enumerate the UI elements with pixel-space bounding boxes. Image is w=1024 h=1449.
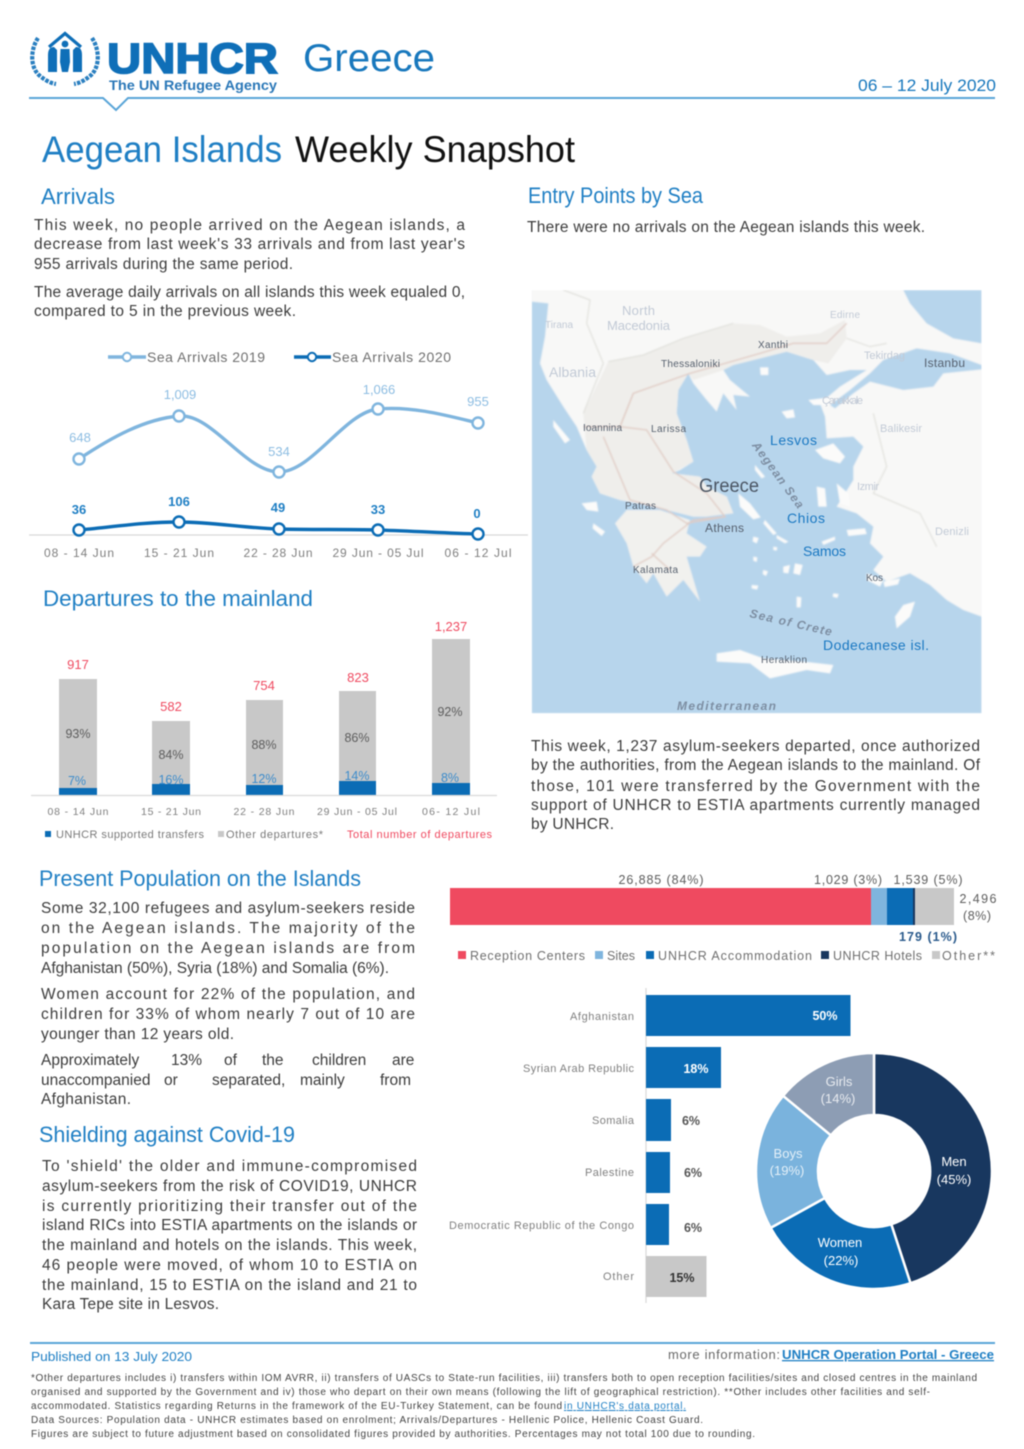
stacked bar legend: Sites (607, 949, 635, 963)
chart axis labels: 08 - 14 Jun (44, 546, 114, 560)
population paragraph: separated, (212, 1072, 285, 1089)
line: sea arrivals 2019: 1,009 (164, 387, 196, 402)
line: sea arrivals 2020: 0 (473, 506, 481, 521)
footnotes: Data Sources: Population data - UNHCR estimates based on enrolment; Arrivals/Departures - Hellenic Police, Hellenic Coast Guard. (31, 1415, 703, 1426)
title (42, 129, 576, 170)
map labels: Kalamata (633, 565, 678, 576)
stacked bar values (618, 873, 997, 944)
origin labels: Syrian Arab Republic (523, 1063, 634, 1075)
logo tagline: The UN Refugee Agency (109, 77, 277, 93)
map labels: Dodecanese isl. (823, 637, 929, 653)
country name: Greece (303, 37, 435, 80)
population paragraph: the (262, 1052, 284, 1069)
map labels: Albania (549, 364, 596, 380)
map labels: Istanbu (924, 356, 965, 370)
donut labels: Men (941, 1154, 967, 1169)
population paragraph (41, 900, 415, 1108)
origin labels (449, 1011, 635, 1283)
line: sea arrivals 2020: 106 (168, 494, 190, 509)
supported percentages: 14% (344, 769, 370, 783)
bar legend (45, 829, 492, 841)
population paragraph: Approximately (41, 1052, 139, 1069)
population paragraph: children for 33% of whom nearly 7 out of 10 are (41, 1006, 415, 1023)
map labels: Athens (705, 521, 744, 535)
total labels (67, 619, 467, 714)
donut labels: (22%) (824, 1253, 858, 1268)
map labels: Edirne (830, 310, 860, 321)
map labels: Heraklion (761, 655, 807, 666)
panel: present population (39, 866, 415, 1108)
population paragraph: mainly (300, 1072, 345, 1089)
other percentages: 93% (65, 727, 91, 741)
origin values: 6% (682, 1114, 700, 1128)
footnotes: *Other departures includes i) transfers within IOM AVRR, ii) transfers of UASCs to State-run facilities, iii) transfers both to open reception facilities/sites and closed centres in the mainland (31, 1373, 977, 1384)
chart axis labels: 29 Jun - 05 Jul (332, 546, 424, 560)
map labels: Greece (699, 476, 759, 497)
heading: arrivals: Arrivals (41, 184, 115, 209)
other percentages: 84% (158, 748, 184, 762)
footnotes: Figures are subject to future adjustment based on consolidated figures provided by authorities. Percentages may not total 100 due to rounding. (31, 1429, 755, 1440)
map of Greece and the Aegean (532, 290, 982, 713)
departures narrative text: This week, 1,237 asylum-seekers departed, once authorized (531, 738, 980, 755)
more information link (668, 1347, 994, 1362)
total labels: 1,237 (435, 619, 467, 634)
population paragraph: children (312, 1052, 366, 1069)
donut labels: Boys (774, 1146, 803, 1161)
panel: shielding against Covid-19 (39, 1122, 417, 1313)
other percentages: 88% (251, 738, 277, 752)
map labels: Balikesir (880, 423, 922, 435)
stacked bar values: 1,539 (5%) (894, 873, 962, 887)
map labels: Denizli (935, 526, 969, 538)
map labels: Xanthi (758, 340, 788, 351)
departures narrative text: by the authorities, from the Aegean islands to the mainland. Of (531, 757, 981, 774)
population paragraph: younger than 12 years old. (41, 1026, 234, 1043)
footnotes: in UNHCR's data portal. (564, 1401, 686, 1412)
line: sea arrivals 2019: 534 (268, 444, 290, 459)
bar axis labels: 06- 12 Jul (422, 806, 480, 818)
line: sea arrivals 2019 (69, 382, 489, 478)
origin values: 15% (669, 1271, 695, 1285)
total labels: 823 (347, 670, 369, 685)
population paragraph: Some 32,100 refugees and asylum-seekers reside (41, 900, 415, 917)
arrivals paragraph: This week, no people arrived on the Aegean islands, a (34, 217, 465, 234)
stacked bar values: 2,496 (960, 892, 997, 906)
shielding paragraph: Kara Tepe site in Lesvos. (42, 1296, 219, 1313)
total labels: 582 (160, 699, 182, 714)
stacked bar values: 1,029 (3%) (814, 873, 882, 887)
bar axis labels: 29 Jun - 05 Jul (317, 806, 397, 818)
origin labels: Other (603, 1271, 634, 1283)
bar legend: Other departures* (226, 829, 324, 841)
date range: 06 – 12 July 2020 (858, 76, 996, 95)
donut labels: (45%) (937, 1172, 971, 1187)
bar axis labels (48, 806, 480, 818)
header (29, 34, 996, 110)
map labels: Chios (787, 510, 825, 526)
stacked bar legend (458, 949, 995, 963)
map labels: Mediterranean (677, 699, 776, 713)
map labels: Sea of Crete (748, 606, 834, 639)
map labels: Tirana (545, 320, 573, 331)
origin values: 6% (684, 1221, 702, 1235)
shielding paragraph: 46 people were moved, of whom 10 to ESTIA on (42, 1257, 417, 1274)
chart legend: Sea Arrivals 2020 (332, 349, 451, 365)
stacked bar (450, 888, 954, 925)
more information link: more information: (668, 1347, 780, 1362)
line: sea arrivals 2020: 49 (271, 500, 285, 515)
heading: departures: Departures to the mainland (43, 586, 313, 611)
footnotes: accommodated. Statistics regarding Returns in the framework of the EU-Turkey Statement, can be found (31, 1401, 562, 1412)
map labels: North (622, 303, 655, 318)
logo wordmark: UNHCR (107, 35, 278, 83)
publication date: Published on 13 July 2020 (31, 1349, 192, 1364)
stacked bar values: (8%) (963, 909, 991, 923)
icon: UNHCR emblem (32, 34, 98, 84)
chart axis labels (44, 546, 512, 560)
map labels: Ioannina (583, 423, 622, 434)
bars: other departures (59, 639, 470, 788)
chart legend: Sea Arrivals 2019 (147, 349, 265, 365)
chart axis labels: 06 - 12 Jul (444, 546, 512, 560)
donut labels: Girls (826, 1074, 853, 1089)
map labels: Aegean Sea (749, 438, 807, 511)
heading: entry points: Entry Points by Sea (528, 183, 704, 208)
donut chart: age and gender (756, 1053, 992, 1289)
line: sea arrivals 2019: 648 (69, 430, 91, 445)
departures narrative text: those, 101 were transferred by the Government with the (531, 778, 980, 795)
line: sea arrivals 2019: 955 (467, 394, 489, 409)
population paragraph: Women account for 22% of the population, and (41, 986, 415, 1003)
map labels: Çanakkale (822, 395, 863, 407)
header rule with notch (29, 98, 995, 110)
other percentages: 92% (437, 705, 463, 719)
supported percentages: 12% (251, 772, 277, 786)
donut labels (770, 1074, 971, 1268)
donut labels: (19%) (770, 1163, 804, 1178)
panel: sea arrivals line chart (29, 349, 528, 560)
panel: arrivals text (34, 184, 465, 320)
departures narrative text: support of UNHCR to ESTIA apartments currently managed (531, 797, 980, 814)
title: Aegean Islands (42, 129, 282, 170)
population paragraph: from (380, 1072, 411, 1089)
footnotes: organised and supported by the Government and iv) those who depart on their own means (following the lift of geographical restriction). **Other includes other facilities and self- (31, 1387, 930, 1398)
arrivals paragraph: The average daily arrivals on all islands this week equaled 0, (34, 284, 465, 301)
chart axis labels: 15 - 21 Jun (144, 546, 214, 560)
population paragraph: unaccompanied (41, 1072, 150, 1089)
shielding paragraph: asylum-seekers from the risk of COVID19, UNHCR (42, 1178, 417, 1195)
chart axis labels: 22 - 28 Jun (244, 546, 312, 560)
population paragraph: or (164, 1072, 178, 1089)
origin values: 18% (683, 1062, 709, 1076)
stacked bar values: 26,885 (84%) (618, 873, 704, 887)
total labels: 754 (253, 678, 275, 693)
origin labels: Democratic Republic of the Congo (449, 1220, 634, 1232)
other percentages (65, 705, 463, 762)
heading: present population: Present Population on the Islands (39, 866, 361, 891)
arrivals paragraph: compared to 5 in the previous week. (34, 303, 296, 320)
line: sea arrivals 2020: 33 (371, 502, 385, 517)
shielding paragraph: To 'shield' the older and immune-compromised (42, 1158, 417, 1175)
entry points text: There were no arrivals on the Aegean islands this week. (527, 219, 925, 236)
map labels: Lesvos (770, 432, 817, 448)
map labels: Patras (625, 501, 656, 512)
chart legend (108, 349, 451, 365)
map labels: Tekirdag (864, 350, 905, 362)
arrivals paragraph: decrease from last week's 33 arrivals and from last year's (34, 236, 465, 253)
shielding paragraph: the mainland, 15 to ESTIA on the island and 21 to (42, 1277, 417, 1294)
bar axis labels: 22 - 28 Jun (234, 806, 295, 818)
bar axis labels: 15 - 21 Jun (141, 806, 201, 818)
more information link: UNHCR Operation Portal - Greece (782, 1347, 994, 1362)
arrivals paragraph: 955 arrivals during the same period. (34, 256, 293, 273)
population paragraph: 13% (171, 1052, 202, 1069)
panel: entry points by sea (527, 183, 925, 236)
bar legend: UNHCR supported transfers (56, 829, 204, 841)
bar axis labels: 08 - 14 Jun (48, 806, 109, 818)
shielding paragraph: the mainland and hotels on the islands. This week, (42, 1237, 417, 1254)
bars: UNHCR supported transfers (59, 781, 470, 795)
other percentages: 86% (344, 731, 370, 745)
population paragraph: of (224, 1052, 238, 1069)
panel: accommodation stacked bar (450, 873, 997, 963)
donut labels: (14%) (821, 1091, 855, 1106)
panel: departures bar chart (31, 619, 497, 841)
population paragraph: Afghanistan. (41, 1091, 131, 1108)
shielding paragraph (42, 1158, 417, 1313)
origin labels: Afghanistan (570, 1011, 634, 1023)
origin labels: Palestine (585, 1167, 634, 1179)
map labels: Thessaloniki (661, 359, 720, 370)
origin values: 6% (684, 1166, 702, 1180)
map labels: Kos (866, 573, 883, 584)
origin bars (646, 995, 850, 1245)
supported percentages: 16% (158, 773, 184, 787)
supported percentages: 7% (68, 774, 86, 788)
donut labels: Women (818, 1235, 862, 1250)
stacked bar values: 179 (1%) (899, 930, 957, 944)
map labels: Larissa (651, 424, 686, 435)
origin values (669, 1009, 838, 1285)
map labels: Izmir (857, 481, 879, 493)
departures narrative text (531, 738, 981, 833)
shielding paragraph: island RICs into ESTIA apartments on the islands or (42, 1217, 417, 1234)
heading: shielding: Shielding against Covid-19 (39, 1122, 295, 1147)
shielding paragraph: is currently prioritizing their transfer out of the (42, 1198, 417, 1215)
line: sea arrivals 2019: 1,066 (363, 382, 395, 397)
supported percentages: 8% (441, 771, 459, 785)
population paragraph: on the Aegean islands. The majority of the (41, 920, 415, 937)
map labels: Macedonia (607, 318, 671, 333)
total labels: 917 (67, 657, 89, 672)
bar legend: Total number of departures (347, 829, 492, 841)
stacked bar legend: UNHCR Accommodation (658, 949, 812, 963)
origin labels: Somalia (592, 1115, 635, 1127)
population paragraph: population on the Aegean islands are from (41, 940, 415, 957)
stacked bar legend: UNHCR Hotels (833, 949, 922, 963)
footnotes (31, 1373, 977, 1440)
departures narrative text: by UNHCR. (531, 816, 614, 833)
stacked bar legend: Other** (942, 949, 995, 963)
supported percentages (68, 769, 459, 788)
line: sea arrivals 2020: 36 (72, 502, 86, 517)
population paragraph: Afghanistan (50%), Syria (18%) and Somalia (6%). (41, 960, 389, 977)
line: sea arrivals 2020 (72, 494, 484, 540)
panel: country of origin bar chart (449, 988, 850, 1303)
title: Weekly Snapshot (295, 129, 576, 170)
origin values: 50% (812, 1009, 838, 1023)
footer (30, 1343, 995, 1440)
arrivals paragraph (34, 217, 465, 320)
stacked bar legend: Reception Centers (470, 949, 585, 963)
map labels (545, 303, 969, 713)
map labels: Samos (803, 543, 846, 559)
population paragraph: are (392, 1052, 414, 1069)
